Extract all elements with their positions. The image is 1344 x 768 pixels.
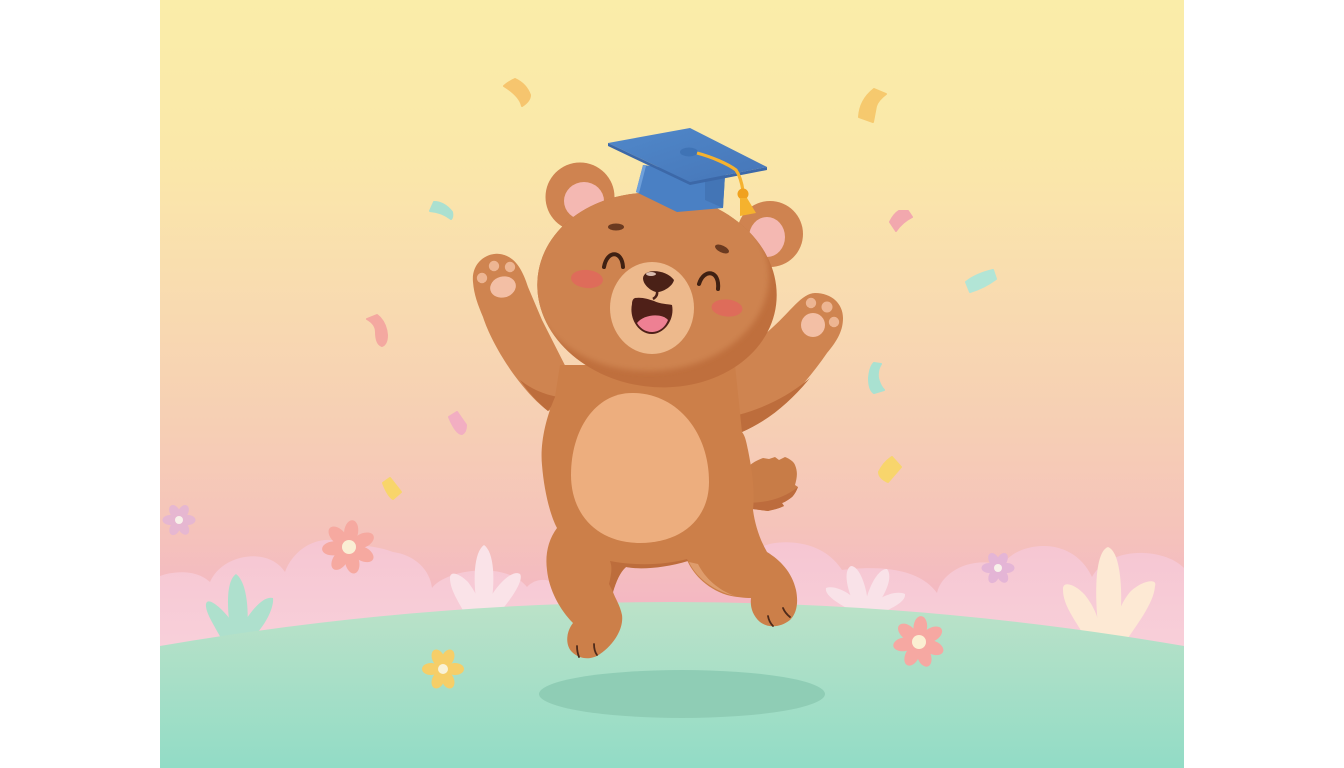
ground hill [160,602,1184,768]
muzzle [610,262,694,354]
eyebrow left [608,224,624,230]
ground shadow [539,670,825,718]
happy eye left [604,254,623,267]
illustration: jumping graduation bear [160,0,1184,768]
flower: lilac left [162,503,196,537]
flower: yellow on grass [422,647,464,691]
bush: left pink clouds [160,540,565,650]
right ear [737,201,803,267]
torso and legs [542,365,797,658]
eyebrow right [714,243,730,255]
mouth open [631,298,672,334]
flower: coral on grass [892,616,946,669]
plant: white right [826,566,905,614]
flower: coral left [321,519,376,575]
plant: mint leaves [206,574,273,645]
plant: cream leaves [1063,547,1155,642]
head [537,193,777,388]
background sky [160,0,1184,768]
right toes [768,608,790,626]
left ear [546,162,614,232]
happy eye right [699,273,718,289]
graduation cap [608,128,767,216]
left arm [473,254,580,411]
flower: lilac right [982,551,1014,585]
cheek left [570,269,604,289]
nose [643,271,674,299]
cheek right [711,298,743,318]
left toes [577,644,597,657]
plant: white left [450,545,521,612]
bush: right pink clouds [760,542,1184,660]
tail [745,457,798,511]
leg shading [609,559,735,596]
belly [571,393,709,543]
confetti pieces [367,79,996,499]
bear [473,128,843,658]
right arm [715,293,843,432]
